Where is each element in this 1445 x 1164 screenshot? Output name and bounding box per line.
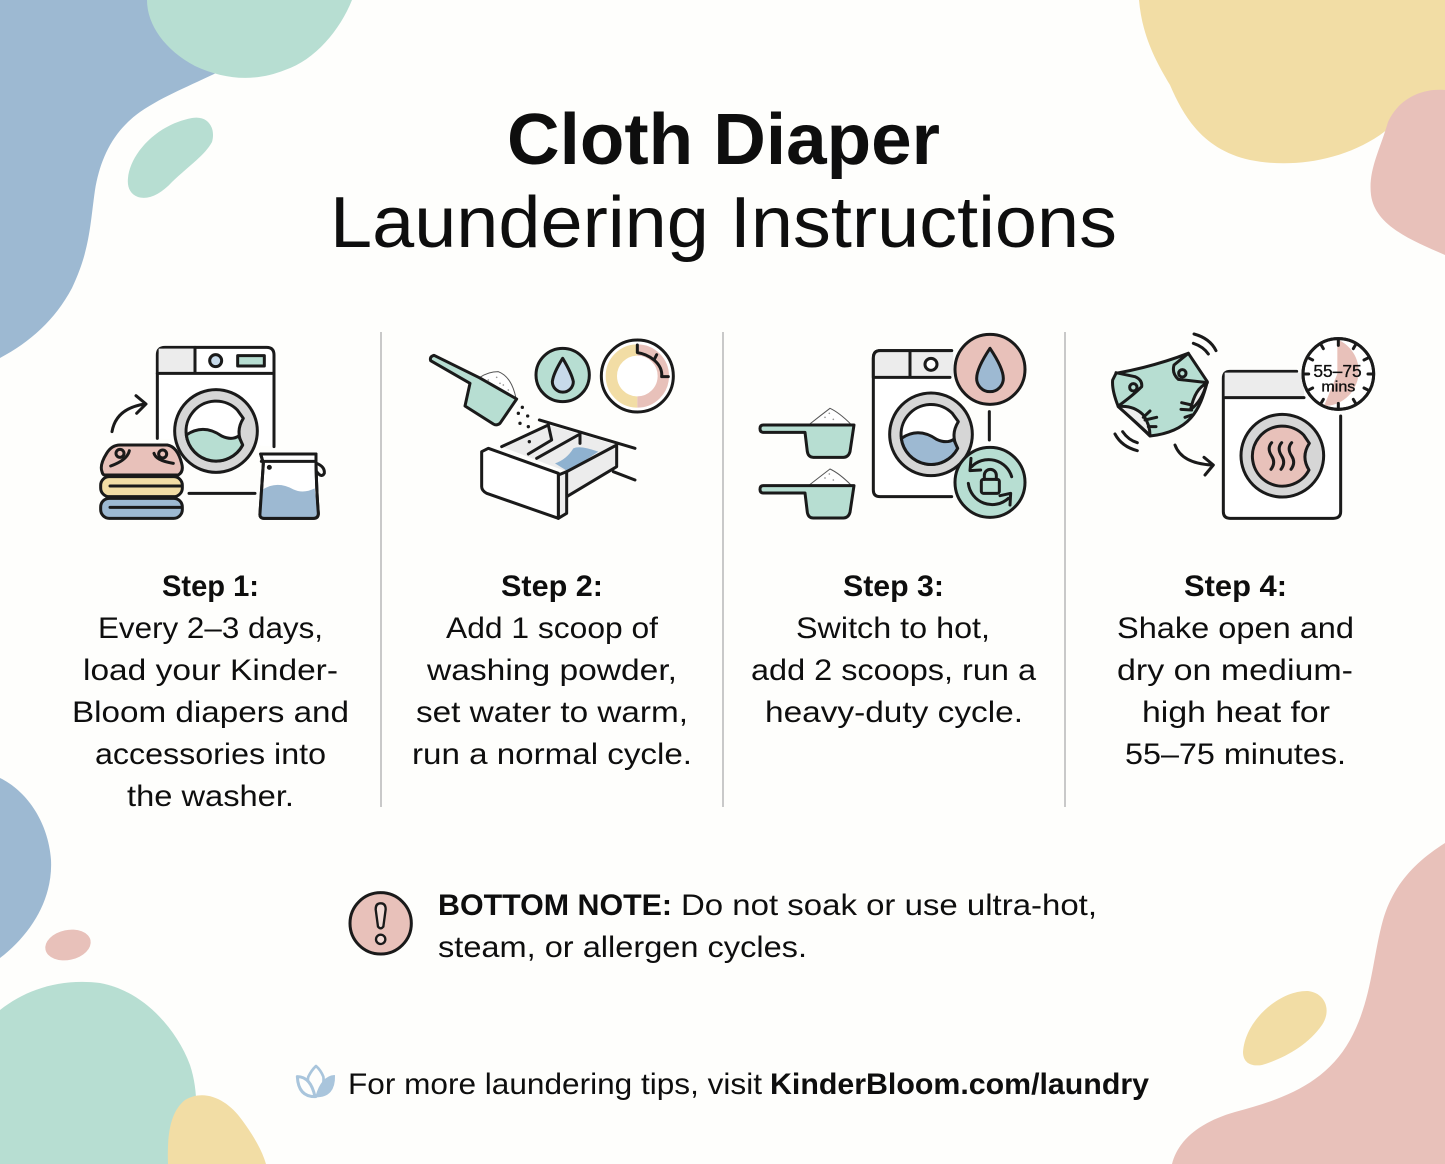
step 2 text: set water to warm,	[416, 696, 688, 729]
panel: step 4	[1113, 334, 1374, 771]
step 3 text: heavy-duty cycle.	[765, 696, 1023, 729]
step 4 text: Step 4:	[1184, 570, 1287, 603]
icon: two scoops, washer, hot drop and lock cycle	[760, 334, 1025, 518]
step 2 text: run a normal cycle.	[412, 738, 692, 771]
icon: scoop pouring powder into drawer	[430, 340, 673, 518]
icon: diaper, dryer and timer: mins	[1321, 380, 1355, 396]
step 4 text: dry on medium-	[1117, 654, 1353, 687]
title	[330, 100, 1117, 263]
panel: step 1	[72, 347, 349, 813]
column dividers	[381, 332, 1065, 807]
step 1 text: load your Kinder-	[83, 654, 338, 687]
panel: step 2	[412, 340, 692, 771]
icon: washer with diaper stack and wet bag	[101, 347, 324, 518]
bottom note text: Do not soak or use ultra-hot,	[681, 889, 1097, 922]
footer text: KinderBloom.com/laundry	[770, 1068, 1149, 1101]
title: Cloth Diaper	[507, 100, 940, 180]
step 3 text: Step 3:	[843, 570, 944, 603]
panel: step 3	[751, 334, 1036, 729]
step 1 text: Every 2–3 days,	[98, 612, 323, 645]
step 1 text: Step 1:	[162, 570, 259, 603]
step 3 text: Switch to hot,	[796, 612, 990, 645]
step 3 text: add 2 scoops, run a	[751, 654, 1036, 687]
footer text	[348, 1068, 1149, 1101]
callout: bottom note	[350, 889, 1097, 964]
step 4 text: 55–75 minutes.	[1125, 738, 1346, 771]
icon: lotus logo	[297, 1066, 334, 1097]
step 1 text: accessories into	[95, 738, 326, 771]
step 3 text	[751, 570, 1036, 729]
step 4 text: Shake open and	[1117, 612, 1354, 645]
step 2 text: Add 1 scoop of	[446, 612, 659, 645]
footer	[297, 1066, 1149, 1101]
title: Laundering Instructions	[330, 183, 1117, 263]
icon: warning exclamation	[350, 893, 411, 954]
bottom note text	[438, 889, 1097, 964]
bottom note text: steam, or allergen cycles.	[438, 931, 807, 964]
icon: diaper, dryer and timer	[1113, 334, 1374, 518]
step 2 text: Step 2:	[501, 570, 603, 603]
bottom note text: BOTTOM NOTE:	[438, 889, 672, 922]
footer text: For more laundering tips, visit	[348, 1068, 763, 1101]
step 2 text	[412, 570, 692, 771]
step 1 text: Bloom diapers and	[72, 696, 349, 729]
step 1 text	[72, 570, 349, 813]
step 4 text: high heat for	[1142, 696, 1330, 729]
icon: diaper, dryer and timer: 55–75	[1313, 361, 1362, 381]
step 2 text: washing powder,	[426, 654, 677, 687]
step 4 text	[1117, 570, 1354, 771]
step 1 text: the washer.	[127, 780, 294, 813]
